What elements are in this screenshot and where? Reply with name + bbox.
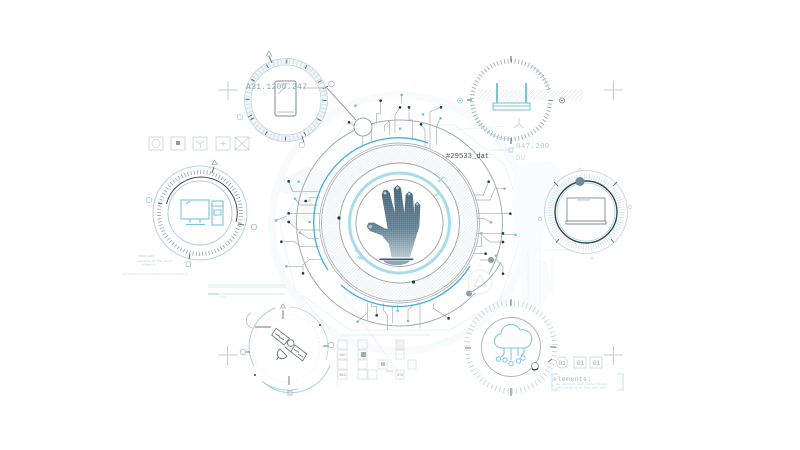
icon: small fan	[514, 118, 524, 128]
network nodes	[275, 94, 517, 323]
panel: phone dial	[237, 51, 334, 148]
icon: desktop computer	[181, 200, 223, 225]
crosshair: satellite	[218, 346, 238, 365]
crosshair: phone	[218, 81, 238, 100]
binary tags: 01	[593, 360, 601, 367]
small ticks on blue ring	[355, 177, 444, 259]
icon: wifi router	[493, 83, 530, 110]
crosshair: router	[604, 81, 623, 100]
outer grey ring	[296, 120, 502, 326]
panel: router dial: DU	[516, 155, 525, 163]
binary tags	[556, 357, 602, 368]
label: phone address: A31.1200.247	[246, 83, 307, 92]
panel: elements caption: use abstract bigc, other things	[555, 382, 607, 386]
small hub with grey nodes	[466, 257, 501, 296]
binary tags: 01	[558, 360, 566, 367]
row of small icons	[149, 137, 249, 150]
icon: satellite	[272, 328, 307, 361]
hatched band	[330, 154, 468, 292]
faint dashed strip	[122, 273, 188, 275]
crosshair: cloud	[604, 346, 623, 365]
panel: data grid: 376	[397, 374, 403, 378]
icon: wireframe hand	[367, 185, 420, 265]
panel: elements caption: elements:	[553, 376, 592, 383]
panel: elements caption	[552, 374, 623, 390]
label: router value: 047.200	[516, 143, 550, 151]
circuit traces around central core	[276, 95, 515, 330]
light blue nodes	[275, 94, 517, 323]
endpoint markers	[458, 98, 462, 103]
panel: router dial	[458, 56, 583, 163]
dial ticks	[248, 62, 324, 138]
bright blue arcs	[314, 138, 470, 307]
tiny caption: SCAN DATA	[139, 255, 154, 258]
dial handles	[248, 56, 328, 143]
dial ticks	[472, 61, 550, 139]
thick light blue ring	[350, 173, 450, 273]
label: data id: #29533_dat	[446, 153, 489, 161]
panel: data grid: BK3	[340, 374, 346, 378]
central core rings	[296, 120, 502, 326]
hatched band	[478, 90, 583, 100]
icon: cloud network	[494, 324, 532, 366]
tiny caption	[137, 255, 173, 266]
panel: elements caption: information with link data here	[555, 386, 607, 390]
panel: data grid: 087	[340, 354, 346, 358]
binary tags: 01	[577, 360, 585, 367]
connector circle and line	[327, 88, 372, 136]
dial ticks	[467, 303, 555, 391]
ring node dots	[337, 216, 415, 284]
tiny caption: sequence of the input	[137, 259, 173, 263]
icon: laptop	[566, 198, 606, 224]
hand base plate	[379, 257, 413, 262]
icon: smartphone	[275, 81, 296, 116]
dark nodes	[280, 99, 512, 320]
faint background network and world map	[272, 95, 575, 375]
fingertip nails	[369, 186, 418, 228]
dial ticks	[159, 172, 241, 254]
panel: data grid	[337, 335, 430, 385]
panel: satellite dial	[240, 304, 334, 395]
panel: computer dial	[137, 160, 257, 266]
panel: laptop dial	[538, 168, 632, 260]
bars under computer	[208, 284, 286, 297]
panel: cloud dial	[465, 299, 556, 396]
tiny caption: elements	[142, 262, 156, 266]
